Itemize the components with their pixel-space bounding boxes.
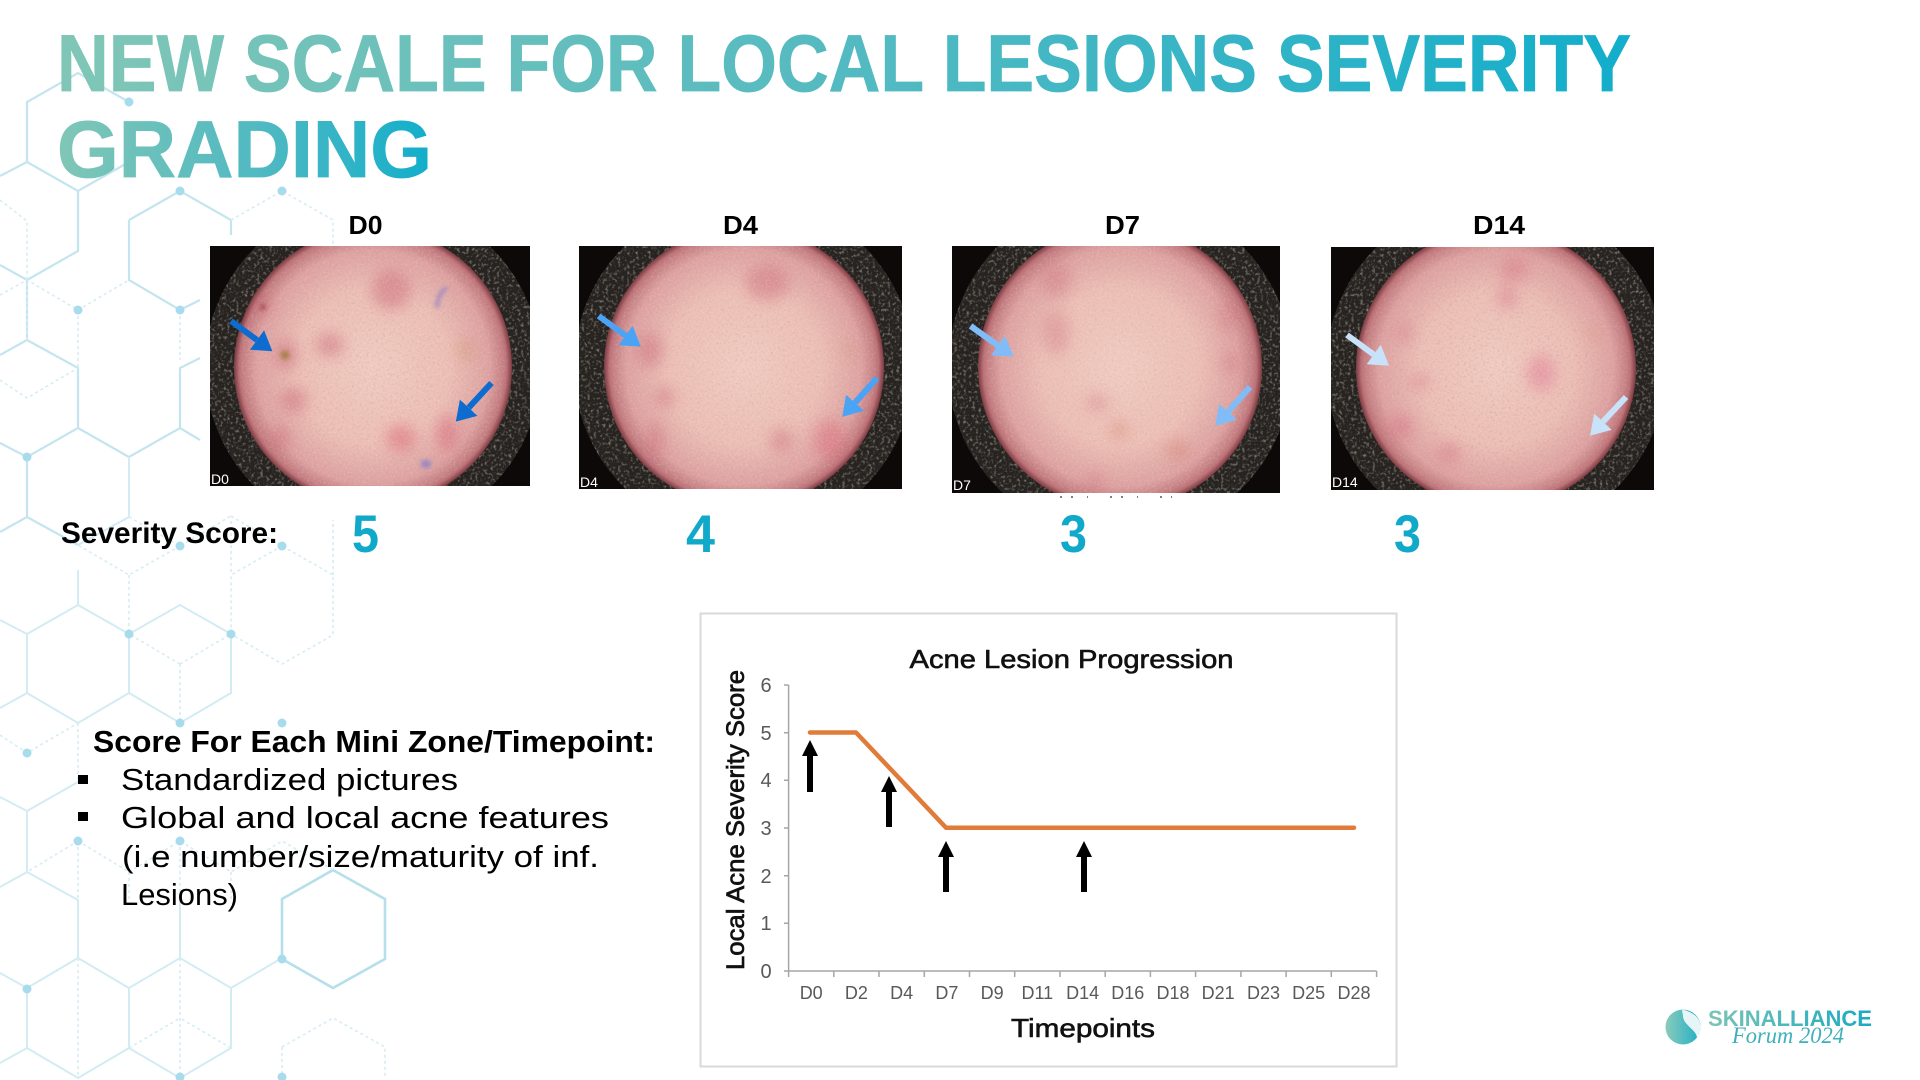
arrow: D0 marker bbox=[802, 740, 818, 792]
x axis labels bbox=[800, 983, 1371, 1003]
chart title: Acne Lesion Progression bbox=[910, 644, 1234, 674]
x axis labels: D11 bbox=[1021, 983, 1053, 1003]
y axis labels: 3 bbox=[760, 818, 772, 840]
photo: D14 skin close-up bbox=[1331, 247, 1654, 490]
data line bbox=[810, 732, 1354, 828]
label: severity score: Severity Score: bbox=[61, 517, 278, 550]
y axis labels: 6 bbox=[760, 675, 772, 697]
arrow: D4 lower right bbox=[855, 378, 877, 403]
arrow: D4 upper left bbox=[599, 316, 626, 336]
timepoint label: D14: D14 bbox=[1473, 210, 1526, 240]
text block: score criteria bbox=[78, 724, 655, 912]
x axis labels: D16 bbox=[1111, 983, 1144, 1003]
bullet list: (i.e number/size/maturity of inf. bbox=[122, 839, 599, 874]
timepoint label: D4: D4 bbox=[723, 210, 759, 240]
photo: D4 skin close-up: D4 bbox=[580, 474, 598, 490]
x axis labels: D25 bbox=[1292, 983, 1325, 1003]
photo: D4 skin close-up bbox=[579, 246, 902, 489]
x axis labels: D4 bbox=[890, 983, 913, 1003]
subheading: Score For Each Mini Zone/Timepoint: bbox=[93, 724, 655, 759]
x axis labels: D14 bbox=[1066, 983, 1099, 1003]
x axis labels: D23 bbox=[1247, 983, 1280, 1003]
score: D4: 4 bbox=[686, 505, 716, 564]
photo: D7 skin close-up: D7 bbox=[953, 477, 971, 493]
background: hexagon pattern bbox=[0, 73, 385, 1080]
arrow: D14 marker bbox=[1076, 841, 1092, 892]
arrow: D0 upper left bbox=[231, 321, 257, 340]
axes bbox=[784, 685, 1377, 977]
y axis labels: 4 bbox=[760, 770, 772, 792]
y axis labels: 0 bbox=[760, 961, 772, 983]
x axis labels: D28 bbox=[1337, 983, 1371, 1003]
timepoint label: D7: D7 bbox=[1105, 210, 1140, 240]
bullet list: Global and local acne features bbox=[121, 800, 609, 835]
photo: D0 skin close-up: D0 bbox=[211, 471, 229, 487]
photo: D7 skin close-up bbox=[952, 246, 1280, 493]
x axis labels: D7 bbox=[935, 983, 958, 1003]
bullet list bbox=[78, 762, 609, 912]
title bbox=[57, 19, 1631, 195]
photo: D14 skin close-up: D14 bbox=[1332, 474, 1358, 490]
timepoint label: D0: D0 bbox=[348, 210, 382, 240]
arrow: D14 upper left bbox=[1347, 335, 1374, 354]
score: D7: 3 bbox=[1060, 505, 1087, 564]
logo: Skinalliance Forum 2024: Forum 2024 bbox=[1731, 1023, 1844, 1048]
score: D0: 5 bbox=[352, 505, 379, 564]
arrow: D7 upper left bbox=[970, 326, 998, 346]
y axis labels: 2 bbox=[760, 866, 772, 888]
bullet list: Standardized pictures bbox=[121, 762, 458, 797]
logo: Skinalliance Forum 2024: SKINALLIANCE bbox=[1708, 1006, 1872, 1031]
y axis labels: 5 bbox=[760, 723, 772, 745]
arrow: D0 lower right bbox=[469, 383, 492, 408]
arrow: D7 lower right bbox=[1228, 387, 1250, 412]
logo: Skinalliance Forum 2024 bbox=[1666, 1006, 1872, 1048]
x axis labels: D9 bbox=[981, 983, 1004, 1003]
title: NEW SCALE FOR LOCAL LESIONS SEVERITY bbox=[57, 19, 1631, 109]
x axis labels: D21 bbox=[1202, 983, 1235, 1003]
arrow: D4 marker bbox=[881, 776, 897, 827]
x axis title: Timepoints bbox=[1011, 1013, 1155, 1043]
y axis labels: 1 bbox=[760, 913, 772, 935]
photo: D0 skin close-up bbox=[210, 246, 530, 486]
bullet list: Lesions) bbox=[121, 877, 238, 912]
panel: line chart bbox=[700, 614, 1396, 1066]
x axis labels: D18 bbox=[1156, 983, 1190, 1003]
score: D14: 3 bbox=[1394, 505, 1421, 564]
y axis title: Local Acne Severity Score bbox=[722, 670, 750, 970]
arrow: D7 marker bbox=[938, 841, 954, 892]
arrow: D14 lower right bbox=[1603, 397, 1626, 422]
x axis labels: D0 bbox=[800, 983, 823, 1003]
y axis labels bbox=[760, 675, 772, 983]
title: GRADING bbox=[57, 105, 432, 195]
x axis labels: D2 bbox=[845, 983, 868, 1003]
